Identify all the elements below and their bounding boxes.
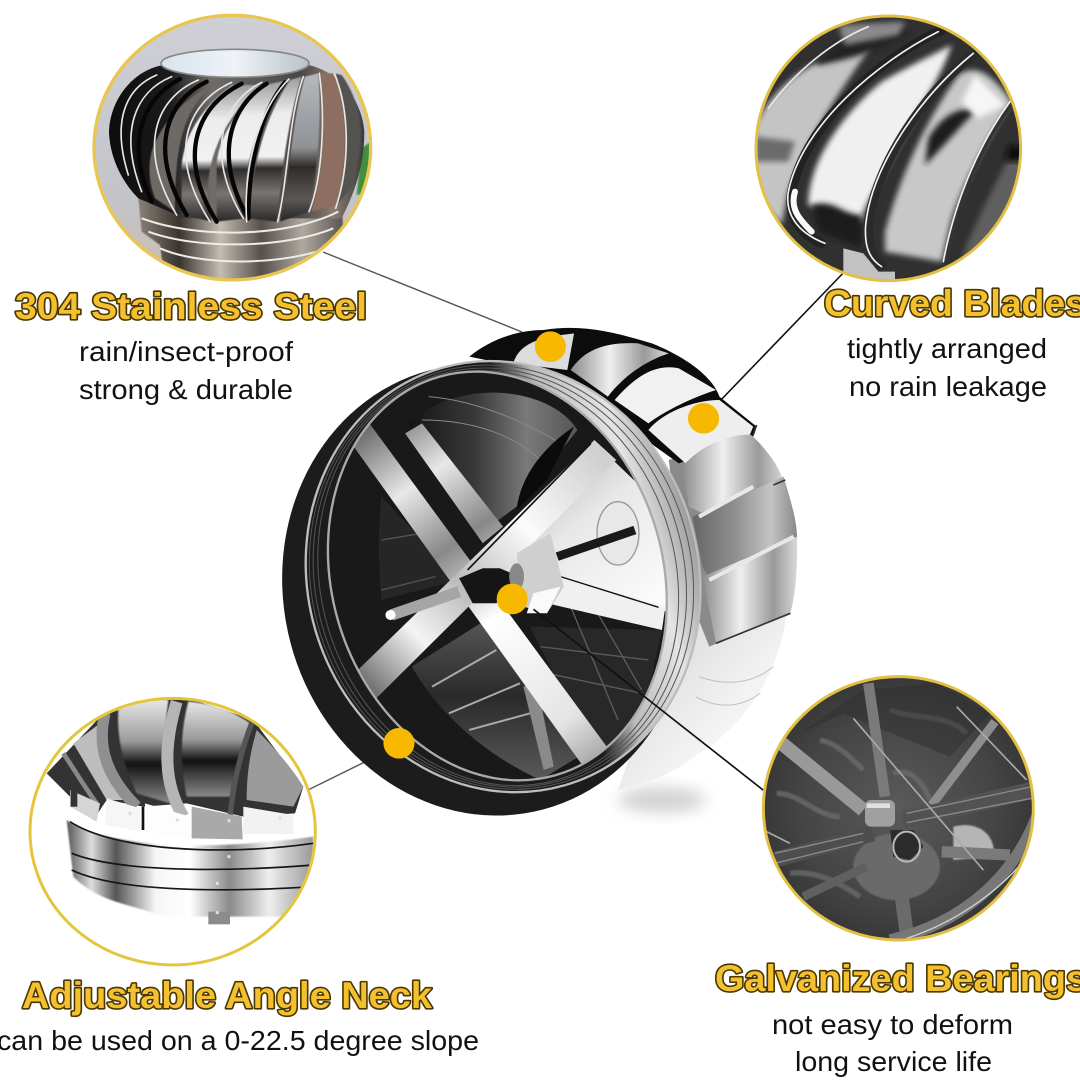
spindle rod [557,530,635,557]
top blades backing [469,328,757,463]
turbine ventilator main illustration [240,315,797,853]
lower right sector [530,626,662,746]
swirled metal texture [777,710,967,897]
neck bands [142,212,338,261]
lid [161,49,309,77]
photo circle: curved blades [754,14,1022,282]
top blade sector [432,392,578,520]
interior [354,374,666,778]
floor shadow [618,787,706,813]
description: can be used on a 0-22.5 degree slope [0,1025,479,1056]
heading: Curved Blades [824,283,1080,324]
disc [597,502,639,565]
top-left blade panel [752,45,872,225]
dome [109,65,364,218]
spokes [773,683,1033,933]
diagonal frame lines [763,707,1027,870]
marker dot: bearing [497,584,528,614]
heading: Galvanized Bearings [715,958,1080,999]
right dome sector [505,462,666,612]
far right panel [961,159,1018,256]
text block: Adjustable Angle Neck [0,975,479,1056]
blade ribs [121,73,346,222]
text block: Curved Blades [824,283,1080,402]
marker dot: curved blade [688,403,719,434]
lower dome [618,607,787,790]
threaded bolt [392,592,459,615]
photo circle: stainless steel ventilator [94,15,375,282]
neck [138,198,343,282]
heading: Adjustable Angle Neck [22,975,432,1016]
leader line: curved blades [718,268,848,403]
right spoke [552,594,665,630]
description line 1: rain/insect-proof [79,336,293,367]
groove lines [70,822,313,890]
spoke 1 [354,424,606,764]
upper blades [47,697,303,820]
marker dot: neck [383,728,415,759]
description line 1: tightly arranged [847,333,1047,364]
ribs [63,702,252,817]
text block: Galvanized Bearings [715,958,1080,1077]
photo circle: adjustable neck [30,697,315,965]
center blade panel [808,45,952,222]
leader line: galvanized bearings [534,609,769,795]
hub and bolts [865,800,895,827]
heading: 304 Stainless Steel [15,286,367,327]
photo circle: galvanized bearings [763,677,1037,940]
rim grooves [259,320,744,834]
bright dish [953,825,994,860]
reflective panels [149,73,361,222]
inner silver ring [280,332,714,820]
hub plate [517,533,564,613]
description line 2: long service life [795,1046,992,1077]
text block: 304 Stainless Steel [15,286,367,405]
dark outer ring [240,327,732,853]
minor spoke [405,423,503,543]
description line 1: not easy to deform [772,1009,1013,1040]
description line 2: no rain leakage [849,371,1047,402]
dark frame top [800,683,990,757]
flange plate [843,248,895,282]
lower minor spoke [523,683,554,770]
curved blades [513,333,797,643]
rim arc [890,817,1037,940]
marker dot: top blades [535,331,566,362]
lower sector [412,623,577,778]
leader line: stainless steel [323,252,522,332]
spoke 2 [344,440,616,708]
neck bands [67,820,313,917]
right blade panel [885,70,1012,262]
dark opening [517,427,574,510]
description line 2: strong & durable [79,374,293,405]
leader line: adjustable neck [308,752,385,790]
green plant [356,142,369,196]
rib lines [768,27,1012,267]
body under blades [669,435,797,647]
flange plates [105,798,141,832]
bracket [208,912,230,924]
hub [459,568,510,604]
silver front rim [255,315,752,839]
left sector [379,497,450,600]
